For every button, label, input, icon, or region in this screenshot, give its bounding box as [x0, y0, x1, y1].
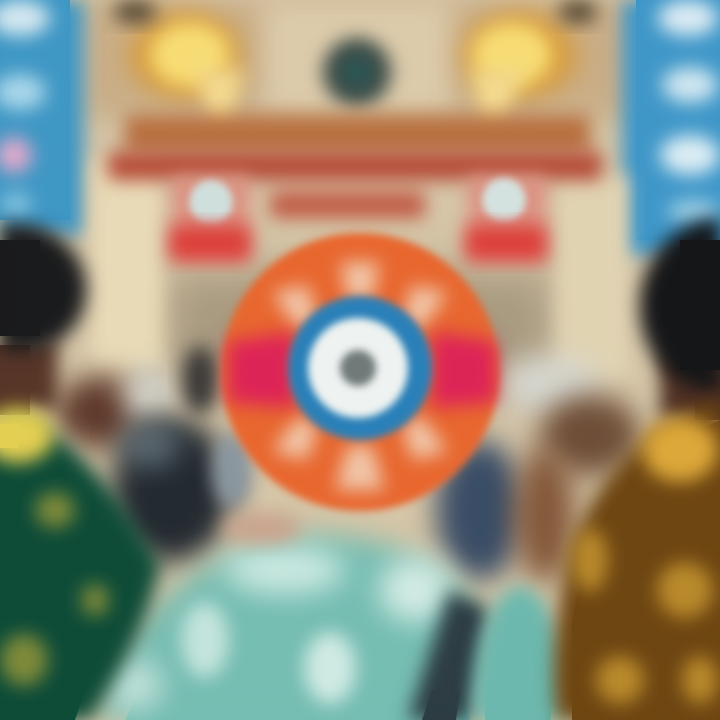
prize wheel — [221, 233, 499, 511]
right banner — [466, 176, 546, 262]
left foreground person — [0, 223, 160, 720]
right column — [556, 175, 628, 380]
right person: brown patterned shirt — [554, 400, 720, 720]
centre person: teal shirt — [100, 512, 480, 720]
right person: dark hair — [640, 218, 720, 392]
background: hall wall — [86, 0, 624, 416]
wheel: blue ring — [288, 296, 432, 440]
right person: shirt spots — [572, 418, 718, 704]
left middle crowd — [56, 346, 252, 562]
orange beam — [125, 115, 590, 153]
right middle crowd — [436, 355, 640, 583]
left person: neck — [0, 340, 58, 415]
wheel: pale segments — [272, 262, 448, 490]
right foreground person — [554, 218, 720, 720]
right ceiling light — [464, 0, 598, 132]
dark strap between figures — [408, 590, 490, 720]
left person: yellow collar — [0, 407, 54, 463]
red blurred headline band — [108, 152, 602, 218]
teal figure lower right — [474, 585, 567, 720]
right person: neck — [660, 350, 720, 420]
left ceiling light — [113, 0, 245, 132]
wheel: orange disc — [221, 233, 499, 511]
left column — [92, 160, 162, 370]
left window — [0, 0, 84, 235]
left person: green shirt — [0, 418, 160, 720]
round dark clock — [323, 38, 391, 106]
wheel: pink side segments — [228, 332, 496, 408]
wheel: grey hub — [340, 350, 376, 386]
right window — [622, 0, 720, 255]
left person: dark hair — [0, 223, 86, 352]
wheel: white ring — [308, 318, 408, 418]
left banner — [170, 176, 250, 262]
left person: shirt spots — [0, 492, 109, 686]
